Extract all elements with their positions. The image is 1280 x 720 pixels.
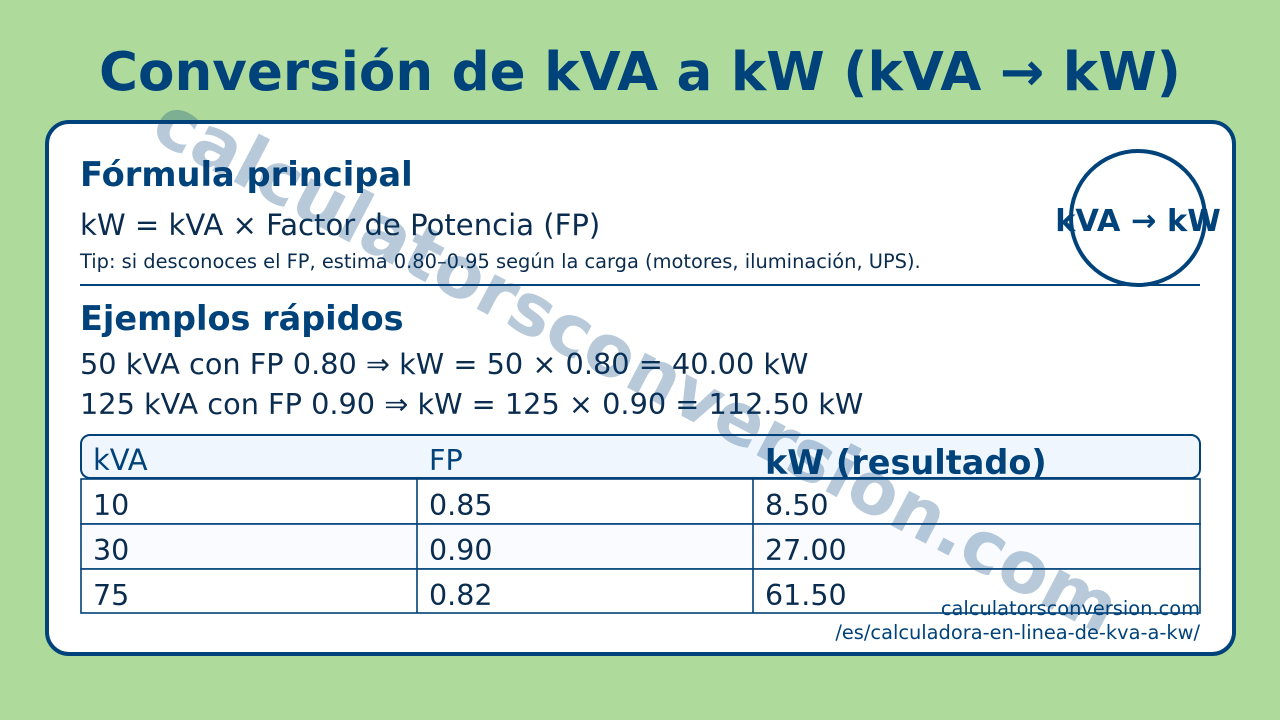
watermark: calculatorsconversion.com bbox=[140, 79, 1133, 651]
section: main formula bbox=[79, 155, 921, 273]
badge: kVA to kW circle bbox=[1055, 151, 1221, 285]
panel: main card bbox=[47, 122, 1234, 654]
row 2 bbox=[81, 524, 1200, 569]
title: Conversión de kVA a kW (kVA → kW) bbox=[99, 41, 1181, 103]
row 1: 10 bbox=[93, 489, 129, 522]
heading: examples: Ejemplos rápidos bbox=[80, 299, 404, 338]
example 1: 50 kVA con FP 0.80 ⇒ kW = 50 × 0.80 = 40.00 kW bbox=[80, 347, 808, 381]
source url: /es/calculadora-en-linea-de-kva-a-kw/ bbox=[835, 621, 1200, 644]
row 1 bbox=[81, 479, 1200, 524]
example 2: 125 kVA con FP 0.90 ⇒ kW = 125 × 0.90 = 112.50 kW bbox=[80, 387, 863, 421]
row 2: 0.90 bbox=[429, 534, 492, 567]
row 1: 0.85 bbox=[429, 489, 492, 522]
row 3 bbox=[81, 569, 1200, 613]
row 3: 0.82 bbox=[429, 579, 492, 612]
row 1: 8.50 bbox=[765, 489, 828, 522]
row 3: 75 bbox=[93, 579, 129, 612]
section: quick examples bbox=[80, 299, 863, 421]
heading: formula: Fórmula principal bbox=[80, 155, 413, 194]
badge: kVA to kW circle: kVA → kW bbox=[1055, 204, 1221, 239]
table header: FP bbox=[429, 443, 463, 477]
table header bbox=[81, 435, 1200, 482]
source url: calculatorsconversion.com bbox=[941, 597, 1200, 620]
table: sample conversions bbox=[81, 435, 1200, 613]
table header: kVA bbox=[93, 443, 148, 477]
table header: kW (resultado) bbox=[765, 443, 1047, 482]
formula text: kW = kVA × Factor de Potencia (FP) bbox=[80, 208, 600, 242]
source url bbox=[835, 597, 1200, 644]
row 2: 27.00 bbox=[765, 534, 847, 567]
row 2: 30 bbox=[93, 534, 129, 567]
tip text: Tip: si desconoces el FP, estima 0.80–0.95 según la carga (motores, iluminación, UPS). bbox=[79, 250, 921, 273]
row 3: 61.50 bbox=[765, 579, 847, 612]
